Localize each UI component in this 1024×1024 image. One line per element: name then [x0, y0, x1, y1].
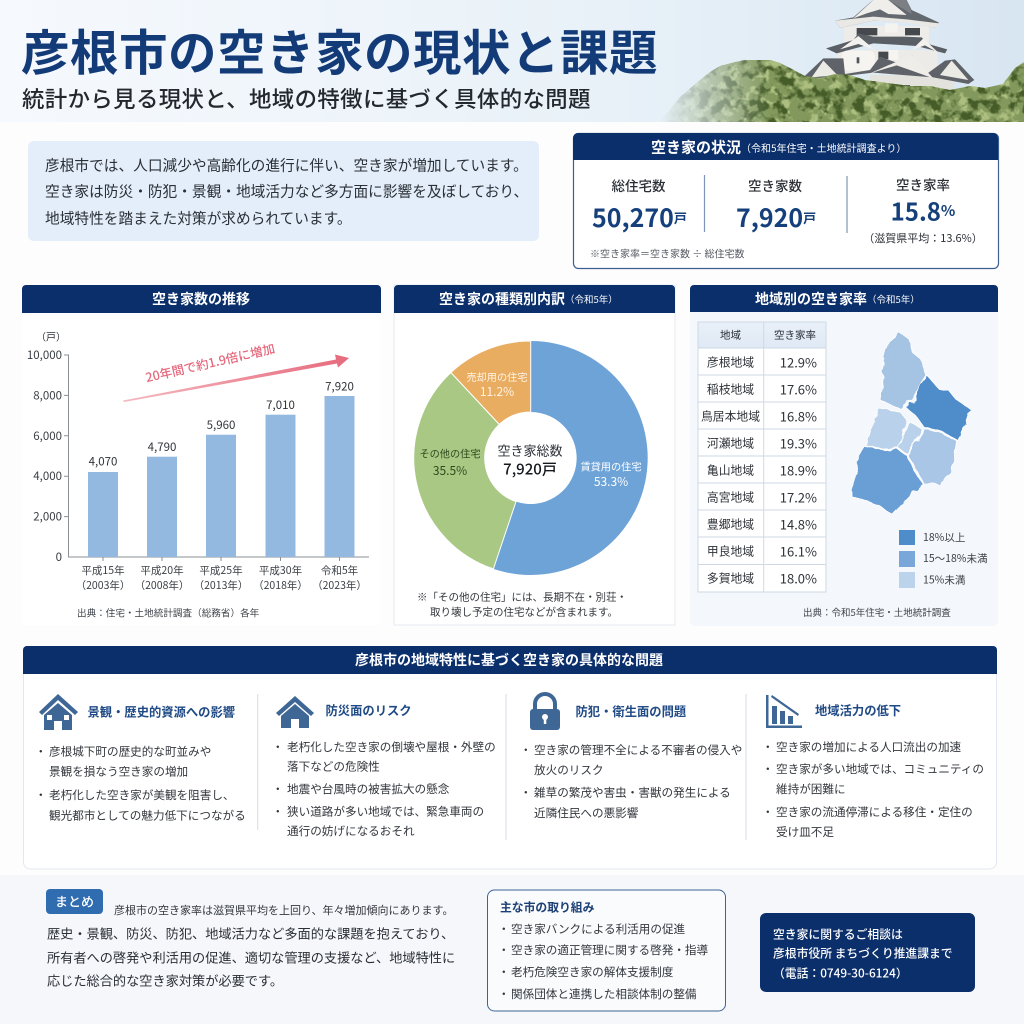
bar chart: 7,920: [325, 379, 354, 395]
footnote: rate formula: ※空き家率＝空き家数 ÷ 総住宅数: [590, 246, 744, 260]
heading: breakdown: 空き家の種類別内訳（令和5年）: [439, 289, 618, 309]
bullets: vitality: ・: [762, 804, 774, 820]
icon: house: [39, 694, 78, 730]
panel: rate by area: [690, 285, 998, 626]
table: area rates: 12.9%: [780, 352, 817, 372]
panel: vacancy status: [573, 133, 998, 268]
table: area rates: 彦根地域: [707, 354, 754, 370]
panel: city initiatives: 主な市の取り組み: [500, 898, 595, 916]
legend: map: 18%以上: [923, 530, 965, 545]
subtitle: 統計から見る現状と、地域の特徴に基づく具体的な問題: [22, 82, 591, 114]
bar chart: 8,000: [33, 387, 62, 403]
illustration: Hikone castle: [803, 0, 974, 95]
bullets: vitality: 維持が困難に: [776, 781, 846, 797]
bullets: disaster: ・: [272, 804, 284, 820]
text: summary: 応じた総合的な空き家対策が必要です。: [47, 970, 283, 990]
stat: vacant houses: 空き家数: [748, 175, 802, 195]
panel: trend bar chart: [22, 285, 381, 625]
panel: introduction: 彦根市では、人口減少や高齢化の進行に伴い、空き家が増加しています。: [45, 154, 528, 176]
panel: city initiatives: ・: [498, 964, 510, 980]
panel: specific issues: [23, 646, 997, 869]
table: area rates: 甲良地域: [707, 542, 754, 560]
bullets: vitality: 空き家の流通停滞による移住・定住の: [776, 804, 973, 820]
bullets: crime: 放火のリスク: [534, 762, 604, 778]
bullets: vitality: [762, 739, 984, 840]
heading: rate by area: 地域別の空き家率（令和5年）: [755, 289, 920, 309]
bullets: disaster: [272, 739, 496, 839]
panel: city initiatives: [488, 890, 726, 1011]
bar chart: （2008年）: [135, 578, 189, 593]
text: summary: [47, 902, 455, 990]
donut chart: [414, 341, 648, 575]
table: area rates: 多賀地域: [707, 570, 754, 586]
table: area rates: 16.1%: [780, 542, 817, 560]
panel: breakdown by type: [394, 285, 675, 625]
bar chart: 0: [56, 549, 62, 565]
bullets: disaster: 落下などの危険性: [287, 759, 380, 775]
panel: city initiatives: ・: [498, 986, 510, 1002]
table: area rates: 18.9%: [780, 460, 817, 480]
heading: crime: 防犯・衛生面の問題: [576, 702, 687, 720]
donut chart: 35.5%: [433, 462, 467, 479]
text: summary: 所有者への啓発や利活用の促進、適切な管理の支援など、地域特性に: [47, 948, 455, 966]
bar chart: （2018年）: [253, 578, 308, 593]
bullets: vitality: 空き家が多い地域では、コミュニティの: [776, 761, 984, 777]
table: area rates: 14.8%: [780, 514, 817, 534]
callout: contact: 彦根市役所 まちづくり推進課まで: [773, 944, 953, 962]
issue: crime and hygiene: [520, 694, 742, 821]
bullets: landscape: [35, 744, 246, 824]
table: area rates: 亀山地域: [707, 462, 754, 478]
source: trend chart: 出典：住宅・土地統計調査（総務省）各年: [77, 606, 260, 620]
bar chart: 平成25年: [199, 563, 243, 578]
bar chart: 5,960: [207, 417, 235, 433]
callout: 1.9x increase: 20年間で約1.9倍に増加: [143, 338, 277, 386]
bullets: crime: 雑草の繁茂や害虫・害獣の発生による: [534, 785, 731, 801]
bullets: landscape: 観光都市としての魅力低下につながる: [49, 808, 246, 824]
bullets: landscape: 老朽化した空き家が美観を阻害し、: [49, 787, 235, 803]
legend: map: [899, 530, 988, 588]
bar chart: （2013年）: [194, 578, 248, 593]
text: summary: 歴史・景観、防災、防犯、地域活力など多面的な課題を抱えており、: [47, 924, 454, 942]
issue: landscape and heritage: [35, 694, 246, 824]
bar chart: 平成15年: [81, 563, 125, 578]
issue: disaster risk: [272, 696, 496, 839]
callout: contact: 空き家に関するご相談は: [773, 926, 903, 942]
table: area rates: 地域: [720, 328, 741, 342]
table: area rates: 鳥居本地域: [701, 408, 760, 424]
bullets: disaster: 通行の妨げになるおそれ: [287, 823, 415, 839]
table: area rates: [698, 322, 826, 592]
heading: disaster: 防災面のリスク: [326, 701, 412, 719]
source: area data: 出典：令和5年住宅・土地統計調査: [803, 605, 951, 619]
panel: city initiatives: ・: [498, 921, 510, 937]
heading: trend: 空き家数の推移: [152, 289, 250, 309]
bullets: crime: 空き家の管理不全による不審者の侵入や: [534, 742, 742, 758]
bullets: crime: ・: [520, 742, 532, 758]
badge: summary: [46, 889, 103, 914]
table: area rates: 空き家率: [774, 328, 816, 342]
donut chart: 賃貸用の住宅: [580, 458, 642, 474]
legend: map: 15～18%未満: [923, 551, 988, 566]
heading: vitality: 地域活力の低下: [815, 701, 901, 719]
donut chart: 7,920戸: [503, 458, 557, 480]
bar chart: 平成20年: [140, 563, 184, 578]
bar chart: 4,070: [89, 454, 117, 470]
donut chart: その他の住宅: [419, 446, 481, 460]
bar chart: 4,790: [148, 439, 176, 455]
illustration: trees: [660, 60, 1024, 122]
stat: vacant houses: 7,920戸: [736, 199, 816, 235]
bullets: vitality: ・: [762, 739, 774, 755]
callout: contact: [760, 913, 975, 992]
choropleth map: [851, 332, 971, 515]
panel: city initiatives: 老朽危険空き家の解体支援制度: [511, 964, 674, 980]
note: other housing: 取り壊し予定の住宅などが含まれます。: [430, 604, 618, 620]
panel: introduction: 空き家は防災・防犯・景観・地域活力など多方面に影響を及ぼしており、: [45, 180, 528, 202]
bullets: landscape: ・: [35, 744, 47, 760]
title: 彦根市の空き家の現状と課題: [21, 14, 658, 84]
bar chart: 10,000: [27, 347, 62, 363]
icon: padlock: [530, 694, 560, 730]
stat: vacancy rate: （滋賀県平均：13.6%）: [863, 230, 983, 246]
stat: total housing: 総住宅数: [612, 175, 666, 195]
stat: vacant houses: [736, 175, 816, 235]
table: area rates: 豊郷地域: [707, 516, 754, 532]
donut chart: 53.3%: [594, 473, 628, 490]
arrow: upward trend: [123, 354, 349, 402]
panel: introduction: [28, 141, 539, 241]
stat: vacancy rate: 15.8%: [891, 192, 955, 228]
donut chart: 売却用の住宅: [466, 369, 528, 384]
bullets: disaster: 老朽化した空き家の倒壊や屋根・外壁の: [287, 739, 496, 755]
table: area rates: 稲枝地域: [707, 380, 754, 398]
bar chart: （2003年）: [76, 578, 130, 593]
table: area rates: 18.0%: [780, 568, 817, 588]
bar chart: （2023年）: [312, 578, 367, 593]
heading: landscape: 景観・歴史的資源への影響: [88, 702, 235, 720]
issue: community vitality: [762, 695, 984, 840]
panel: summary band: [0, 875, 1024, 1024]
panel: city initiatives: 空き家バンクによる利活用の促進: [511, 921, 686, 937]
bullets: crime: [520, 742, 742, 821]
bar chart: 4,000: [33, 468, 62, 484]
bullets: vitality: 受け皿不足: [776, 824, 834, 840]
stat: total housing: 50,270戸: [592, 199, 687, 235]
bar chart: 2,000: [33, 509, 62, 525]
bullets: disaster: 地震や台風時の被害拡大の懸念: [287, 781, 450, 797]
bullets: disaster: ・: [272, 781, 284, 797]
table: area rates: 19.3%: [780, 434, 817, 452]
note: other housing: ※「その他の住宅」には、長期不在・別荘・: [417, 590, 627, 604]
bullets: vitality: ・: [762, 761, 774, 777]
note: other housing: [417, 590, 627, 620]
icon: house with roof: [276, 696, 314, 728]
legend: map: 15%未満: [923, 572, 966, 588]
bar chart: 6,000: [33, 428, 62, 444]
callout: contact: （電話：0749-30-6124）: [773, 964, 908, 982]
panel: introduction: 地域特性を踏まえた対策が求められています。: [45, 208, 352, 228]
bar chart: 7,010: [266, 397, 295, 413]
panel: city initiatives: 関係団体と連携した相談体制の整備: [511, 986, 697, 1002]
bar chart: 平成30年: [259, 563, 302, 578]
bullets: landscape: ・: [35, 787, 47, 803]
bullets: landscape: 景観を損なう空き家の増加: [49, 764, 188, 780]
bullets: disaster: 狭い道路が多い地域では、緊急車両の: [287, 804, 484, 820]
header banner with castle photo: [44, 0, 1024, 122]
heading: specific issues: 彦根市の地域特性に基づく空き家の具体的な問題: [355, 650, 663, 670]
bar chart: 令和5年: [321, 563, 358, 578]
badge: summary: まとめ: [55, 892, 94, 910]
table: area rates: 17.2%: [780, 488, 817, 506]
panel: city initiatives: 空き家の適正管理に関する啓発・指導: [511, 942, 709, 958]
bullets: landscape: 彦根城下町の歴史的な町並みや: [49, 744, 211, 760]
bullets: crime: 近隣住民への悪影響: [534, 805, 639, 821]
icon: declining chart: [766, 695, 802, 728]
heading: vacancy status: 空き家の状況（令和5年住宅・土地統計調査より）: [651, 136, 906, 158]
bullets: crime: ・: [520, 785, 532, 801]
donut chart: 空き家総数: [497, 440, 563, 460]
bullets: vitality: 空き家の増加による人口流出の加速: [776, 739, 962, 755]
stat: vacancy rate: [863, 174, 983, 246]
table: area rates: 河瀬地域: [707, 434, 754, 452]
donut chart: 11.2%: [480, 383, 514, 400]
stat: vacancy rate: 空き家率: [896, 174, 950, 194]
bar chart: [27, 328, 369, 593]
table: area rates: 16.8%: [780, 406, 817, 426]
table: area rates: 高宮地域: [707, 488, 754, 506]
table: area rates: 17.6%: [780, 380, 817, 398]
text: summary: 彦根市の空き家率は滋賀県平均を上回り、年々増加傾向にあります。: [114, 902, 453, 918]
bullets: disaster: ・: [272, 739, 284, 755]
bar chart: （戸）: [36, 328, 66, 344]
panel: city initiatives: ・: [498, 942, 510, 958]
stat: total housing: [592, 175, 687, 235]
